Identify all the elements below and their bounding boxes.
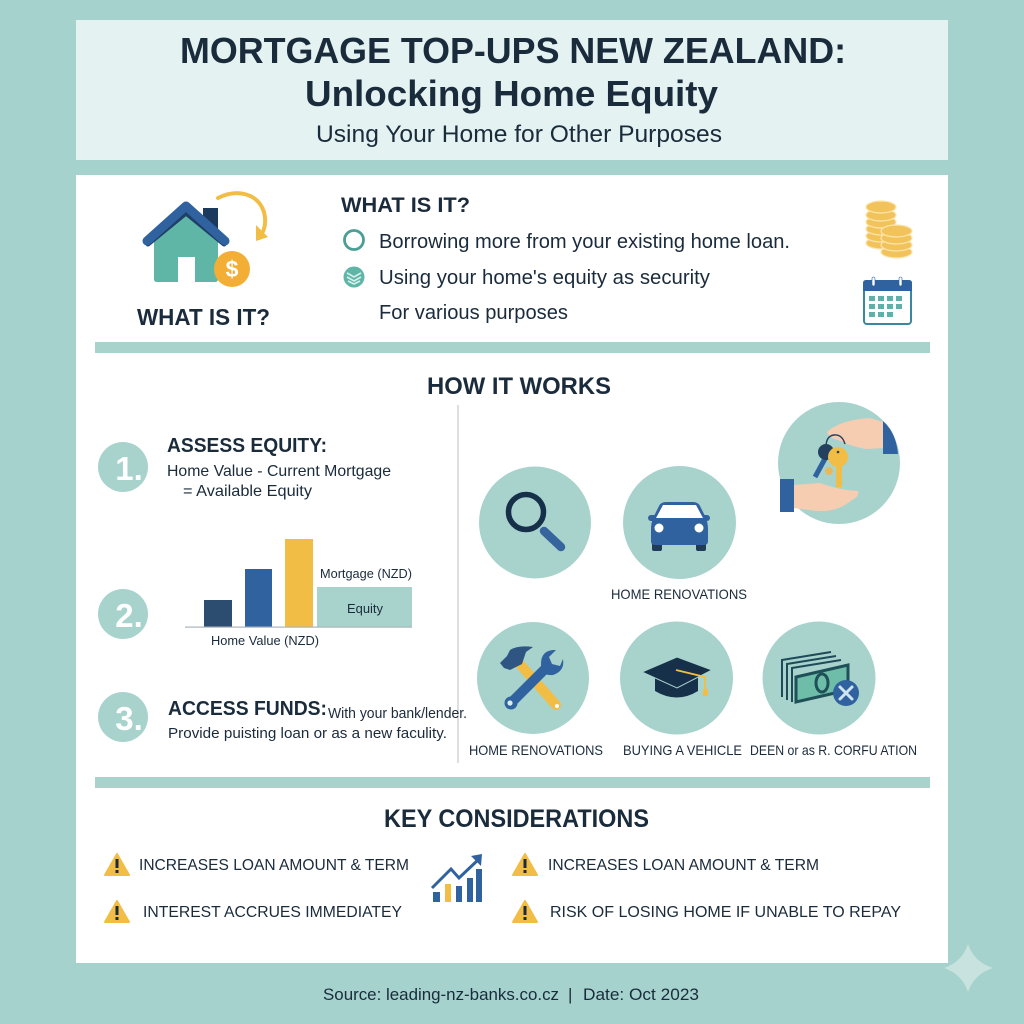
step 3 text: With your bank/lender. [328,706,467,722]
text: bullet two: Using your home's equity as security [379,267,710,289]
icon: graduation cap [620,622,733,734]
heading: how it works: HOW IT WORKS [427,373,611,400]
icon: warning two [105,901,129,922]
panel: main content [76,175,948,963]
label: home renovations lower: HOME RENOVATIONS [469,742,603,758]
text: bullet three: For various purposes [379,302,568,324]
step 1 text: Home Value - Current Mortgage [167,463,391,480]
tagline: Using Your Home for Other Purposes [316,121,722,148]
icon: hammer and wrench [477,622,589,734]
icon: sparkle [944,944,993,992]
icon: calendar [863,277,912,324]
bar chart: Mortgage (NZD) [320,566,412,581]
footer source line: Date: Oct 2023 [583,985,699,1004]
subtitle: Unlocking Home Equity [305,73,718,114]
icon: car [623,466,736,579]
text: consideration two: INTEREST ACCRUES IMMEDIATEY [143,904,402,921]
icon: ring bullet [344,230,364,250]
step 2 badge [98,589,148,639]
step 2 badge: 2. [115,597,143,634]
icon: warning three [513,854,537,875]
icon: layered bullet [344,266,364,288]
panel: title banner [76,20,948,160]
icon: house with dollar coin and arrow [147,193,268,287]
footer source line: Source: leading-nz-banks.co.cz [323,985,559,1004]
icon: magnifier [479,466,591,578]
icon: warning four [513,901,537,922]
text: consideration three: INCREASES LOAN AMOUNT & TERM [548,857,819,874]
heading: what is it left: WHAT IS IT? [137,304,270,330]
icon: cash with cross [762,622,876,734]
step 3 badge: 3. [115,700,143,737]
footer source line [323,985,699,1004]
step 3 text [168,706,467,742]
icon: coin stacks [866,201,912,258]
step 3 heading: ACCESS FUNDS: [168,698,327,720]
divider bar bottom [95,777,930,788]
heading: key considerations: KEY CONSIDERATIONS [384,805,649,833]
label: buying a vehicle: BUYING A VEHICLE [623,742,742,758]
label: home renovations upper: HOME RENOVATIONS [611,586,747,602]
bar chart [185,539,412,648]
icon: warning one [105,854,129,875]
bar chart: Equity [347,601,383,616]
step 1 badge [98,442,148,492]
step 1 text: = Available Equity [183,483,312,500]
icon: hands passing keys [778,402,900,524]
bar chart: Home Value (NZD) [211,633,319,648]
icon: growth chart [432,854,482,902]
step 3 text: Provide puisting loan or as a new faculity. [168,726,447,742]
text: consideration one: INCREASES LOAN AMOUNT & TERM [139,857,409,874]
icon: house with dollar coin and arrow: $ [226,256,239,282]
step 1 heading: ASSESS EQUITY: [167,435,327,457]
heading: what is it right: WHAT IS IT? [341,194,470,217]
step 3 badge [98,692,148,742]
label: debt consolidation garbled: DEEN or as R. CORFU ATION [750,742,917,758]
divider bar top [95,342,930,353]
footer source line: | [568,985,572,1004]
text: consideration four: RISK OF LOSING HOME IF UNABLE TO REPAY [550,904,901,921]
step 1 text [167,463,391,500]
title: MORTGAGE TOP-UPS NEW ZEALAND: [180,30,846,71]
text: bullet one: Borrowing more from your existing home loan. [379,231,790,253]
step 1 badge: 1. [115,450,143,487]
vertical divider [457,405,459,763]
